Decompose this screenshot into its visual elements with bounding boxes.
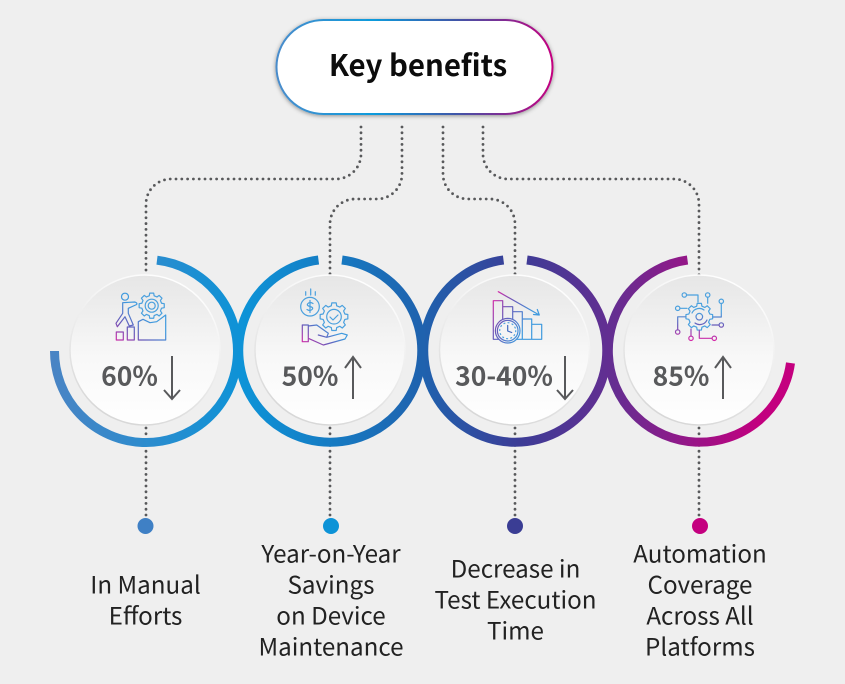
rings (54, 260, 790, 443)
icon: bar chart with clock (493, 292, 542, 343)
label: test execution (434, 518, 597, 646)
label: automation coverage: Coverage (648, 565, 752, 600)
label: in manual efforts (90, 518, 201, 631)
arrow down (164, 356, 180, 399)
label: savings (258, 518, 404, 662)
label: test execution: Time (487, 611, 544, 646)
label: in manual efforts: Efforts (109, 596, 182, 631)
title: Key benefits (329, 43, 507, 85)
value: 85% (653, 354, 709, 394)
label: savings: on Device (276, 596, 386, 631)
label: savings: Maintenance (258, 627, 404, 662)
arrow up (345, 357, 361, 399)
label: automation coverage (633, 518, 767, 662)
label: savings: Year-on-Year (260, 534, 401, 569)
value: 60% (101, 354, 158, 394)
label: in manual efforts: In Manual (90, 565, 201, 600)
value: 30-40% (455, 354, 553, 394)
label: automation coverage: Across All (646, 596, 754, 631)
panel: 60% circle (70, 275, 220, 425)
panel: 85% circle (624, 275, 774, 425)
label: test execution: Test Execution (434, 580, 597, 615)
label: automation coverage: Automation (633, 534, 767, 569)
connector lines from circles to label dots (146, 428, 699, 522)
icon: circuit gear (676, 293, 724, 340)
connector lines from title to circles (146, 127, 699, 275)
panel: 30-40% circle (440, 275, 590, 425)
label: test execution: Decrease in (451, 549, 580, 584)
arrow up (715, 357, 731, 399)
title pill (276, 20, 552, 114)
icon: person climbing to gear (116, 293, 166, 340)
value: 50% (282, 354, 338, 394)
label: savings: Savings (287, 565, 375, 600)
icon: hand with coin and gear (301, 289, 348, 345)
panel: 50% circle (255, 275, 405, 425)
arrow down (557, 356, 573, 399)
label: automation coverage: Platforms (645, 627, 755, 662)
